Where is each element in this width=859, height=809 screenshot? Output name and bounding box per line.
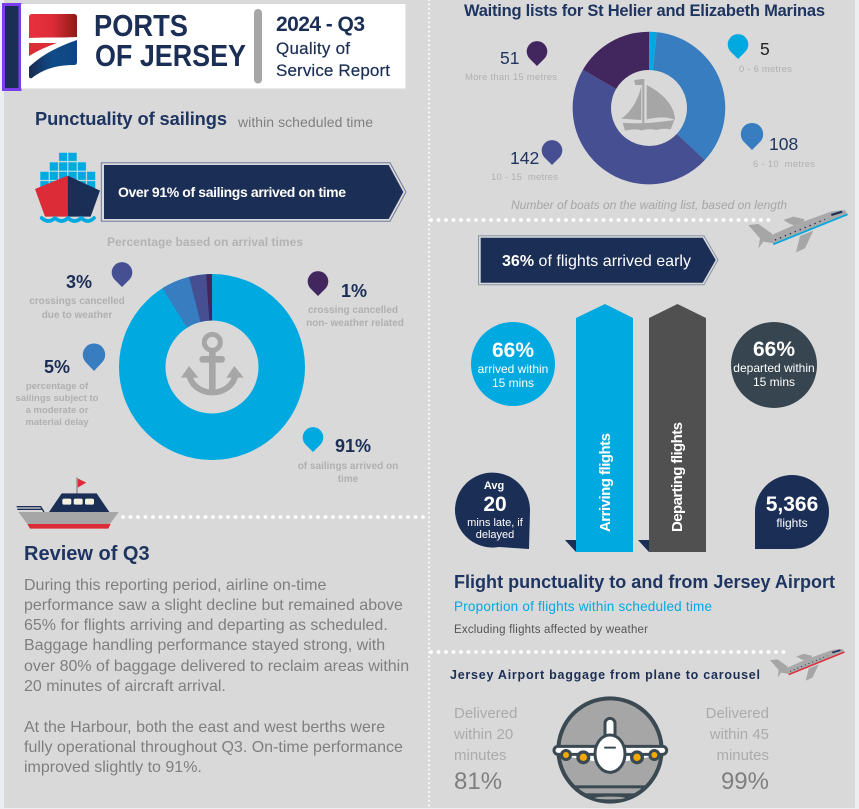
donut chart: waiting lists bbox=[573, 32, 725, 184]
arrow: arriving flights: Arriving flights bbox=[597, 433, 614, 532]
text block: review body: 20 minutes of aircraft arrival. bbox=[24, 678, 226, 695]
callout: 108 boats 6-10 metres: 108 bbox=[769, 134, 798, 154]
stat: 66% arrived: 15 mins bbox=[492, 376, 534, 390]
callout: 142 boats 10-15 metres: 10 - 15 metres bbox=[491, 172, 558, 183]
callout: 108 boats 6-10 metres bbox=[741, 123, 815, 170]
stat: 66% arrived: arrived within bbox=[478, 362, 548, 376]
report title: Service Report bbox=[276, 61, 390, 80]
callout: 142 boats 10-15 metres: 142 bbox=[510, 148, 539, 168]
heading: flight punctuality bbox=[454, 572, 835, 636]
stat: average 20 mins late: delayed bbox=[476, 529, 514, 541]
callout: 5 boats 0-6 metres bbox=[728, 34, 792, 75]
report title: Quality of bbox=[276, 39, 350, 58]
icon: aeroplane with blue stripe bbox=[748, 210, 848, 252]
callout: 5% subject to delay: sailings subject to bbox=[16, 393, 99, 404]
callout: 3% crossings cancelled: 3% bbox=[66, 272, 92, 292]
heading: punctuality of sailings: within scheduled time bbox=[237, 114, 373, 130]
text block: review body: Baggage handling performance stayed strong, with bbox=[24, 637, 385, 654]
stat: average 20 mins late bbox=[455, 473, 530, 549]
stat: delivered within 20 minutes: minutes bbox=[454, 747, 507, 764]
stat: 66% departed bbox=[731, 322, 817, 408]
arrow: departing flights bbox=[638, 304, 706, 552]
text block: review body: over 80% of baggage delivered to reclaim areas within bbox=[24, 658, 409, 675]
heading: punctuality of sailings: Punctuality of sailings bbox=[35, 108, 227, 129]
banner: sailings on time bbox=[101, 163, 406, 221]
stat: 66% departed: departed within bbox=[733, 361, 815, 375]
callout: 91% arrived on time: 91% bbox=[335, 436, 371, 456]
header panel bbox=[21, 4, 406, 88]
callout: 3% crossings cancelled: crossings cancelled bbox=[29, 296, 125, 307]
stat: delivered within 45 minutes: Delivered bbox=[706, 705, 769, 722]
callout: 51 more than 15 metres: 51 bbox=[500, 48, 519, 68]
stat: delivered within 45 minutes: minutes bbox=[716, 747, 769, 764]
stat: 5,366 flights bbox=[755, 475, 829, 549]
callout: 51 more than 15 metres bbox=[465, 41, 557, 83]
heading: review of Q3: Review of Q3 bbox=[24, 543, 150, 565]
arrow: departing flights: Departing flights bbox=[669, 422, 686, 532]
report title bbox=[276, 13, 390, 80]
stat: delivered within 45 minutes: within 45 bbox=[709, 726, 769, 743]
stat: 66% departed: 66% bbox=[753, 338, 795, 361]
stat: delivered within 45 minutes bbox=[706, 705, 769, 795]
text block: review body: 65% for flights arriving and departing as scheduled. bbox=[24, 617, 388, 634]
callout: 108 boats 6-10 metres: 6 - 10 metres bbox=[753, 159, 815, 170]
logo: Ports of Jersey: PORTS bbox=[94, 8, 188, 43]
stat: average 20 mins late: mins late, if bbox=[467, 517, 524, 529]
stat: delivered within 20 minutes: Delivered bbox=[454, 705, 517, 722]
text block: review body: performance saw a slight decline but remained above bbox=[24, 597, 403, 614]
callout: 1% crossing cancelled: non- weather related bbox=[306, 318, 404, 329]
callout: 1% crossing cancelled: crossing cancelled bbox=[308, 305, 398, 316]
heading: waiting lists: Waiting lists for St Helier and Elizabeth Marinas bbox=[464, 2, 825, 20]
callout: 51 more than 15 metres: More than 15 metres bbox=[465, 72, 557, 83]
icon: anchor bbox=[181, 334, 244, 394]
icon: boat bbox=[17, 477, 119, 529]
text block: review body bbox=[24, 577, 409, 776]
banner: flights arrived early: 36% of flights arrived early bbox=[502, 253, 691, 270]
callout: 5% subject to delay: percentage of bbox=[26, 381, 89, 392]
icon: aeroplane with red stripe bbox=[770, 649, 844, 681]
heading: punctuality of sailings bbox=[35, 108, 373, 130]
stat: average 20 mins late: 20 bbox=[483, 493, 507, 516]
callout: 5% subject to delay bbox=[16, 343, 105, 428]
stat: 66% departed: 15 mins bbox=[753, 375, 795, 389]
stat: 66% arrived bbox=[471, 322, 555, 406]
callout: 5 boats 0-6 metres: 0 - 6 metres bbox=[739, 64, 792, 75]
stat: 5,366 flights: flights bbox=[776, 516, 808, 530]
icon: sailboat bbox=[621, 79, 675, 131]
logo: Ports of Jersey bbox=[29, 8, 246, 78]
stat: delivered within 20 minutes: within 20 bbox=[453, 726, 513, 743]
callout: 91% arrived on time bbox=[298, 427, 398, 485]
callout: 3% crossings cancelled: due to weather bbox=[42, 310, 112, 321]
report title: 2024 - Q3 bbox=[276, 13, 365, 36]
callout: 1% crossing cancelled bbox=[306, 271, 404, 329]
text block: review body: At the Harbour, both the east and west berths were bbox=[24, 719, 385, 736]
heading: flight punctuality: Excluding flights affected by weather bbox=[454, 624, 648, 636]
callout: 5% subject to delay: 5% bbox=[44, 357, 70, 377]
banner: flights arrived early bbox=[478, 236, 718, 285]
icon: aeroplane front view bbox=[554, 698, 667, 807]
callout: 1% crossing cancelled: 1% bbox=[341, 281, 367, 301]
callout: 5% subject to delay: material delay bbox=[25, 417, 89, 428]
caption: number of boats: Number of boats on the waiting list, based on length bbox=[511, 198, 787, 212]
stat: delivered within 20 minutes: 81% bbox=[454, 768, 502, 795]
stat: 66% arrived: 66% bbox=[492, 339, 534, 362]
text block: review body: fully operational throughout Q3. On-time performance bbox=[24, 739, 403, 756]
callout: 5 boats 0-6 metres: 5 bbox=[760, 39, 770, 59]
stat: delivered within 20 minutes bbox=[453, 705, 517, 795]
heading: baggage: Jersey Airport baggage from plane to carousel bbox=[450, 668, 760, 682]
arrow: arriving flights bbox=[565, 304, 633, 552]
icon: container ship bbox=[35, 153, 100, 221]
callout: 91% arrived on time: of sailings arrived on bbox=[298, 461, 398, 472]
header strip bbox=[4, 4, 20, 90]
heading: flight punctuality: Proportion of flights within scheduled time bbox=[454, 599, 712, 614]
banner: sailings on time: Over 91% of sailings arrived on time bbox=[118, 184, 346, 200]
heading: flight punctuality: Flight punctuality to and from Jersey Airport bbox=[454, 572, 835, 592]
callout: 5% subject to delay: a moderate or bbox=[26, 405, 89, 416]
callout: 142 boats 10-15 metres bbox=[491, 140, 562, 183]
stat: delivered within 45 minutes: 99% bbox=[721, 768, 769, 795]
stat: average 20 mins late: Avg bbox=[484, 480, 504, 492]
donut chart: sailing punctuality bbox=[142, 297, 282, 437]
caption: percentage based on arrival times: Percentage based on arrival times bbox=[107, 235, 303, 249]
callout: 91% arrived on time: time bbox=[338, 474, 359, 485]
stat: 5,366 flights: 5,366 bbox=[766, 493, 818, 516]
text block: review body: During this reporting period, airline on-time bbox=[24, 577, 326, 594]
callout: 3% crossings cancelled bbox=[29, 262, 132, 321]
logo: Ports of Jersey: OF JERSEY bbox=[95, 38, 246, 73]
text block: review body: improved slightly to 91%. bbox=[24, 759, 202, 776]
